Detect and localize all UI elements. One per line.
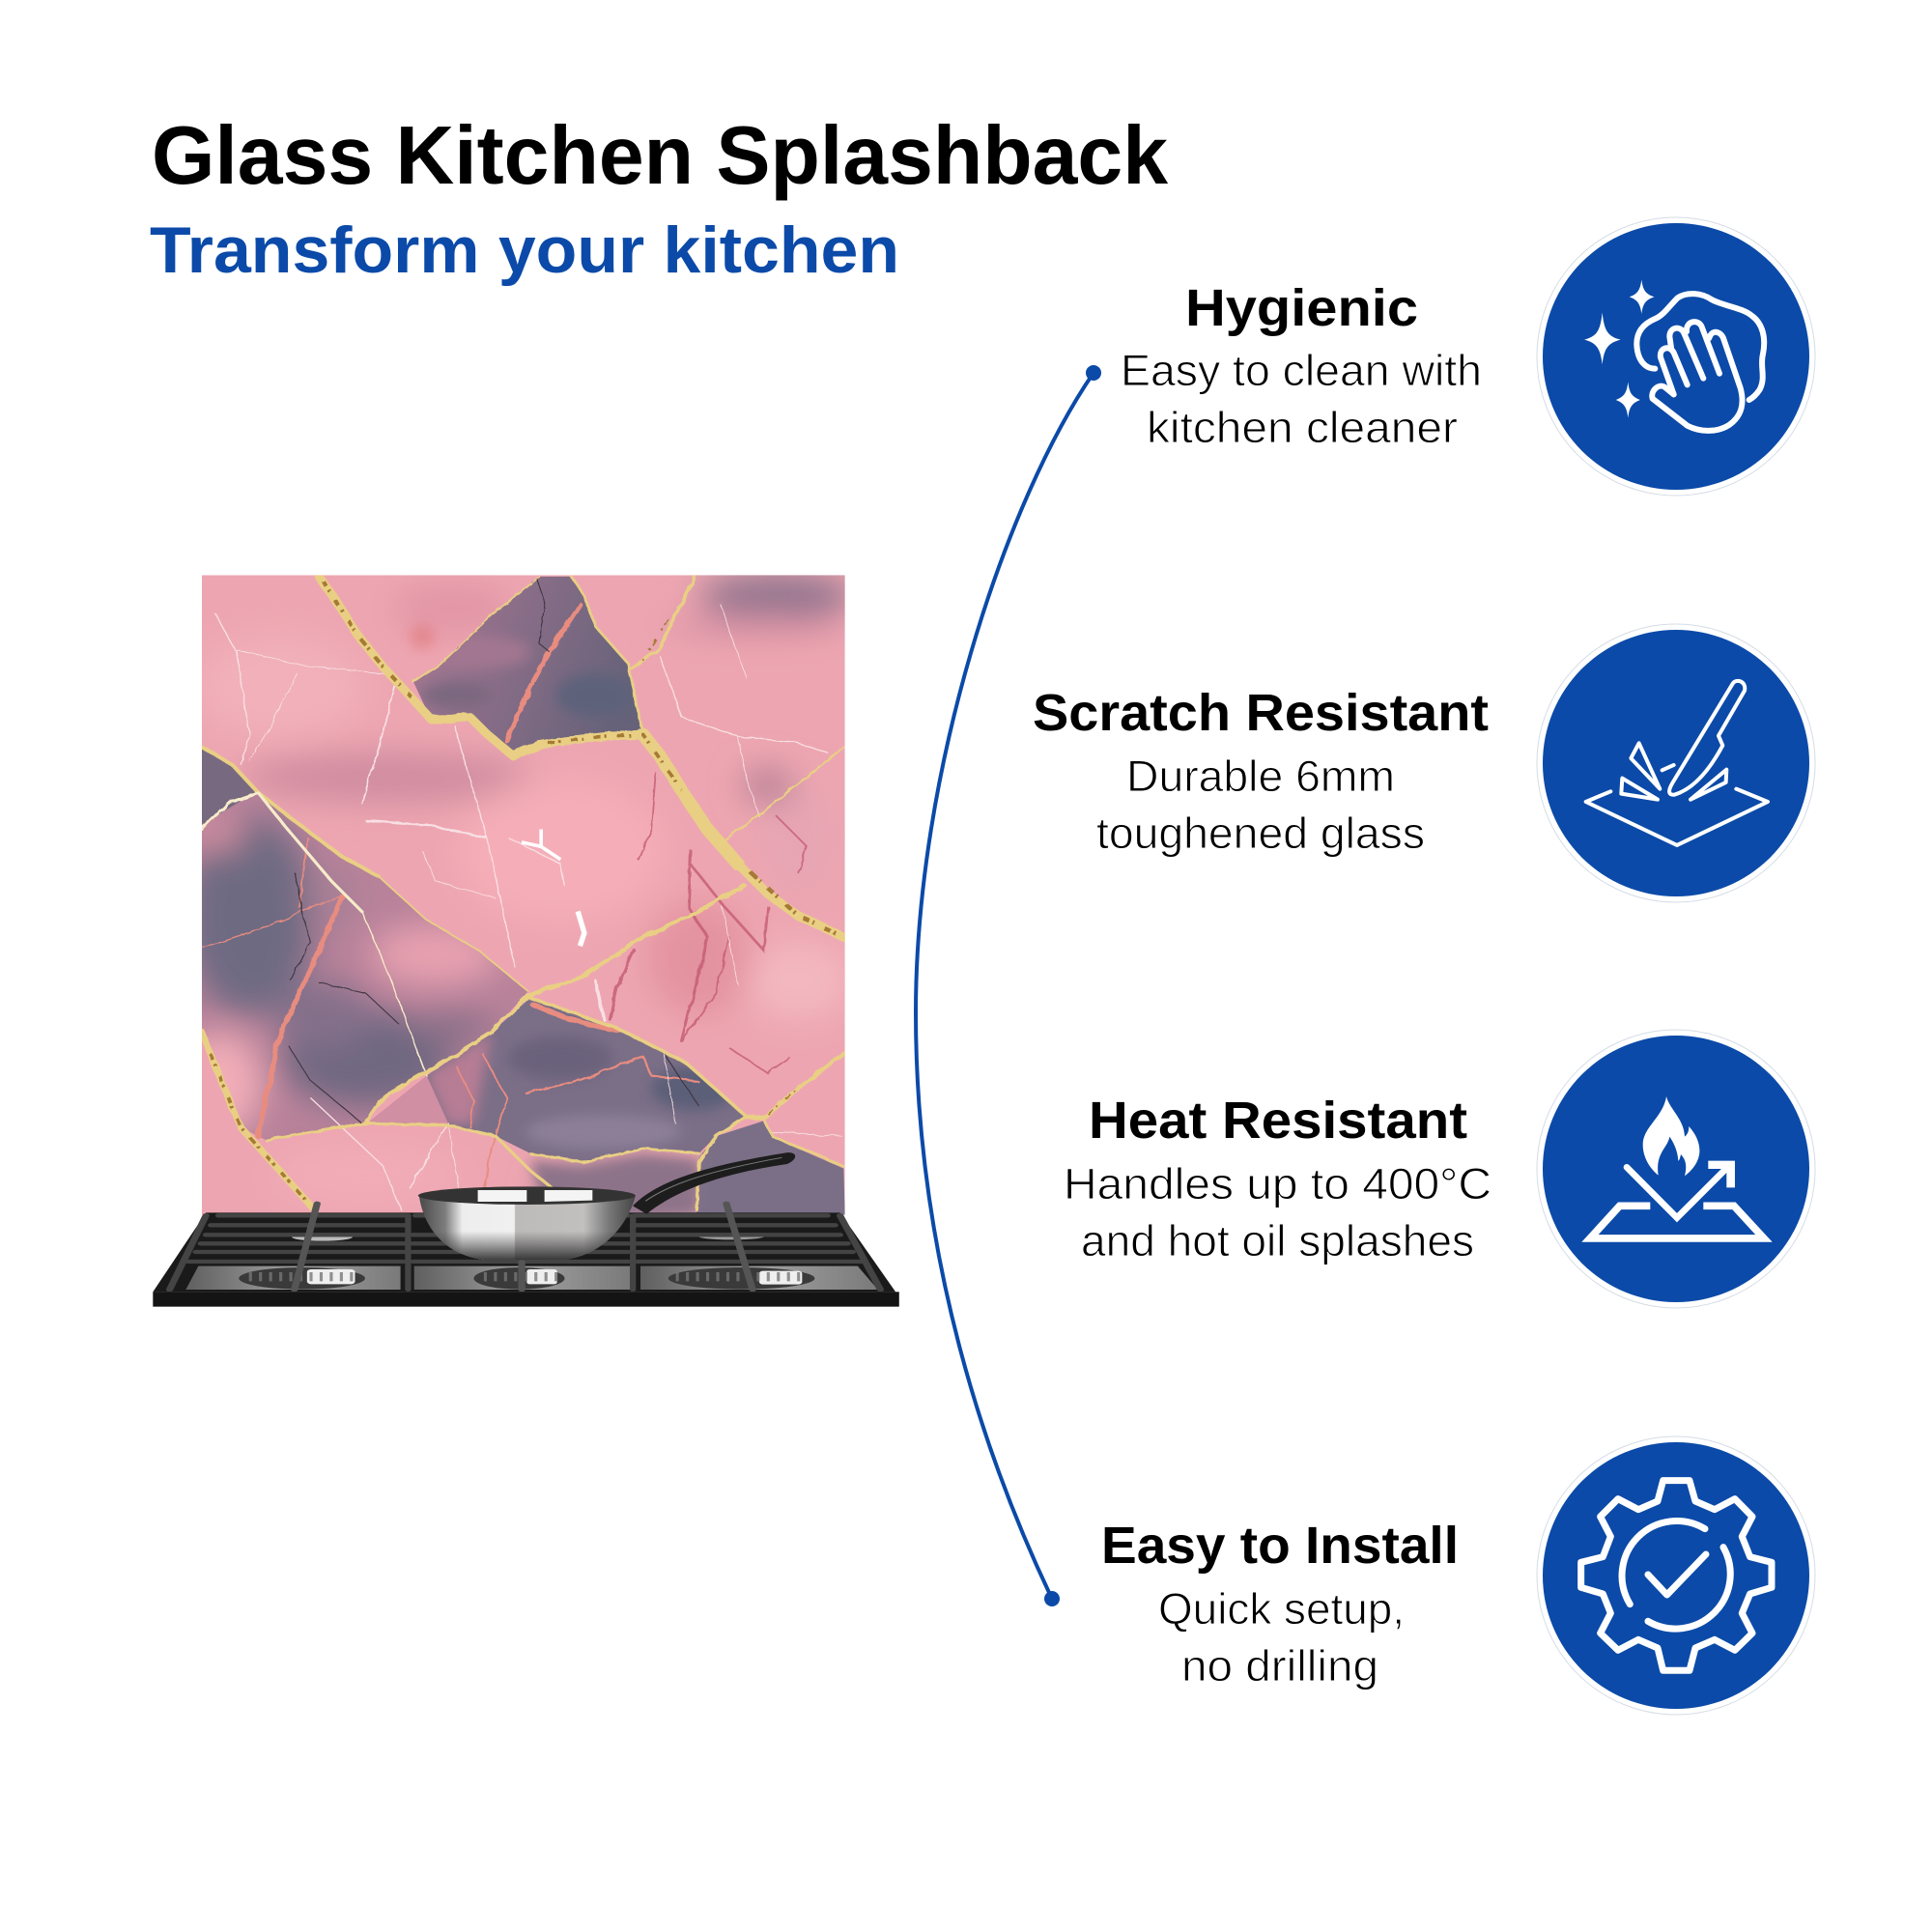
icon: hand wiping with sparkles bbox=[1537, 217, 1815, 496]
feature: Easy to Install bbox=[1101, 1517, 1459, 1690]
grate bars bbox=[170, 1204, 880, 1290]
feature: Easy to Install: Easy to Install bbox=[1101, 1517, 1459, 1575]
feature: Hygienic: Hygienic bbox=[1185, 279, 1418, 337]
dark thin veins bbox=[288, 579, 698, 1123]
dark region near top bbox=[413, 576, 641, 751]
dark region at bottom right bbox=[696, 1121, 845, 1215]
dark flecks in gold veins bbox=[211, 581, 841, 1208]
feature: Easy to Install: no drilling bbox=[1181, 1641, 1378, 1690]
frying pan bbox=[418, 1152, 795, 1260]
feature: Heat Resistant: Handles up to 400°C bbox=[1064, 1159, 1492, 1208]
gas hob with grates bbox=[153, 1152, 899, 1307]
connector curve bbox=[916, 365, 1101, 1606]
feature: Easy to Install: Quick setup, bbox=[1158, 1584, 1405, 1634]
feature: Scratch Resistant: toughened glass bbox=[1096, 809, 1425, 858]
icon: gear with check mark bbox=[1537, 1436, 1815, 1715]
feature: Scratch Resistant: Scratch Resistant bbox=[1033, 684, 1489, 742]
salmon veins bbox=[203, 605, 698, 1197]
icon: flame on surface bbox=[1537, 1030, 1815, 1308]
feature: Heat Resistant: and hot oil splashes bbox=[1081, 1216, 1474, 1265]
feature: Hygienic: Easy to clean with bbox=[1121, 346, 1482, 395]
feature: Hygienic: kitchen cleaner bbox=[1147, 403, 1458, 452]
feature: Heat Resistant bbox=[1064, 1092, 1492, 1265]
white veins bbox=[214, 605, 841, 1209]
red veins bbox=[611, 773, 807, 1073]
icon: knife scratching glass bbox=[1537, 624, 1815, 902]
feature: Heat Resistant: Heat Resistant bbox=[1089, 1092, 1467, 1150]
title: Glass Kitchen Splashback bbox=[152, 110, 1169, 202]
dark region at left bbox=[202, 750, 527, 1140]
subtitle: Transform your kitchen bbox=[150, 213, 899, 287]
dark region at bottom centre bbox=[427, 999, 744, 1161]
feature: Hygienic bbox=[1121, 279, 1482, 452]
marble glass splashback panel bbox=[176, 570, 855, 1223]
feature: Scratch Resistant bbox=[1033, 684, 1489, 858]
front edge bbox=[153, 1292, 899, 1307]
glass deck windows bbox=[185, 1266, 878, 1290]
feature: Scratch Resistant: Durable 6mm bbox=[1126, 752, 1395, 801]
burners bbox=[239, 1234, 814, 1290]
gold veins bbox=[202, 577, 843, 1209]
